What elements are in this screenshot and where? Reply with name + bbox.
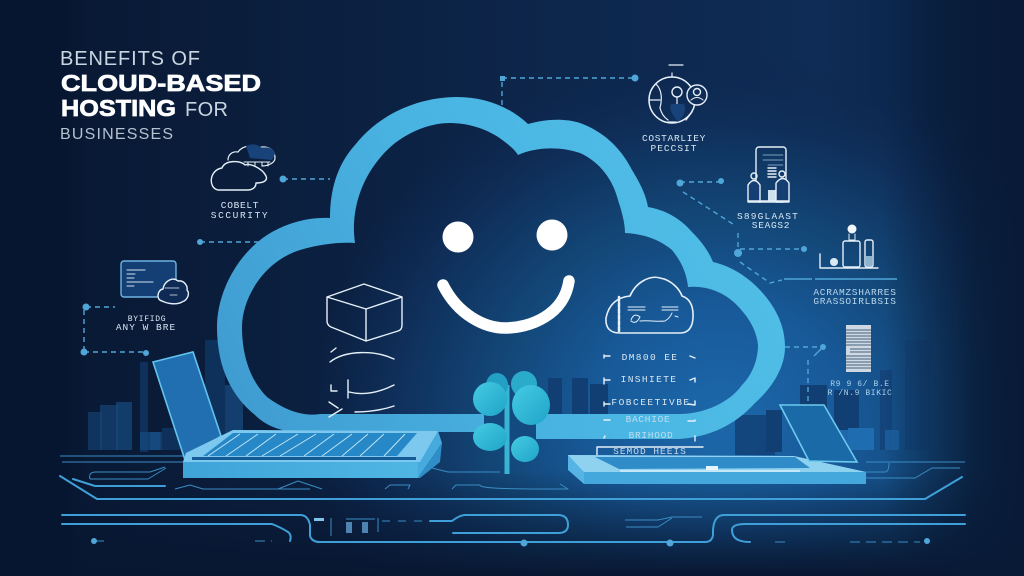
laptop left screen [153, 352, 221, 460]
callout: tablet and people [676, 147, 799, 248]
text list in cloud [597, 352, 703, 457]
icon: server rack [846, 325, 871, 372]
callout: cost security: COBELT [221, 200, 259, 211]
text list in cloud: FOBCEETIVBE [611, 397, 691, 408]
icon: box [327, 284, 402, 417]
callout: top connector and globe: COSTARLIEY [642, 133, 706, 144]
laptop left [153, 352, 442, 478]
text list in cloud: SEMOD HEEIS [613, 446, 687, 457]
callout: anywhere: ANY W BRE [116, 322, 176, 333]
callout: server icon [785, 325, 892, 406]
icon: globe with face [649, 65, 707, 123]
callout: server icon: R9 9 6/ B.E [830, 380, 890, 389]
text list in cloud: INSHIETE [621, 374, 677, 385]
title: FOR [185, 99, 228, 121]
callout: top connector and globe [500, 65, 707, 154]
title: HOSTING [61, 95, 176, 121]
connector [283, 178, 330, 180]
text list in cloud: BRIHOOD [629, 430, 673, 441]
icon: screen and cloud [121, 261, 188, 304]
city skyline left [88, 340, 243, 452]
title: BUSINESSES [60, 126, 173, 143]
callout: tablet and people: SEAGS2 [752, 220, 790, 231]
callout: cost security: SCCURITY [211, 210, 269, 221]
callout: top connector and globe: PECCSIT [651, 143, 697, 154]
callout: anywhere: BYIFIDG [128, 315, 166, 324]
icon: clouds [211, 144, 275, 190]
plant [473, 371, 550, 474]
callout: cost security [197, 144, 330, 245]
text list in cloud: DM800 EE [622, 352, 678, 363]
laptop left deck [183, 430, 442, 478]
laptop right deck [568, 455, 866, 484]
icon: bars and figure [820, 224, 878, 268]
title [60, 48, 261, 143]
laptop right screen [780, 405, 857, 462]
title: CLOUD-BASED [61, 70, 261, 96]
icon: tablet with people [748, 147, 789, 202]
cloud outline [217, 97, 785, 439]
callout: bar chart icon: ACRAMZSHARRES [813, 287, 897, 298]
callout: bar chart icon [734, 224, 897, 307]
callout: bar chart icon: GRASSOIRLBSIS [813, 296, 897, 307]
text list in cloud: BACHIOE [626, 414, 670, 425]
callout: tablet and people: S89GLAAST [737, 211, 799, 222]
connector [84, 307, 146, 352]
city skyline centre and right [548, 340, 931, 455]
laptop right [568, 405, 866, 484]
icon: cloud with code lines [606, 277, 693, 333]
callout: anywhere [80, 261, 188, 356]
cloud gap behind plant [484, 413, 536, 441]
callout: server icon: R /N.9 BIKIC [828, 389, 892, 398]
smiley face [442, 220, 569, 328]
title: BENEFITS OF [60, 48, 200, 70]
circuit board lines [60, 456, 965, 546]
